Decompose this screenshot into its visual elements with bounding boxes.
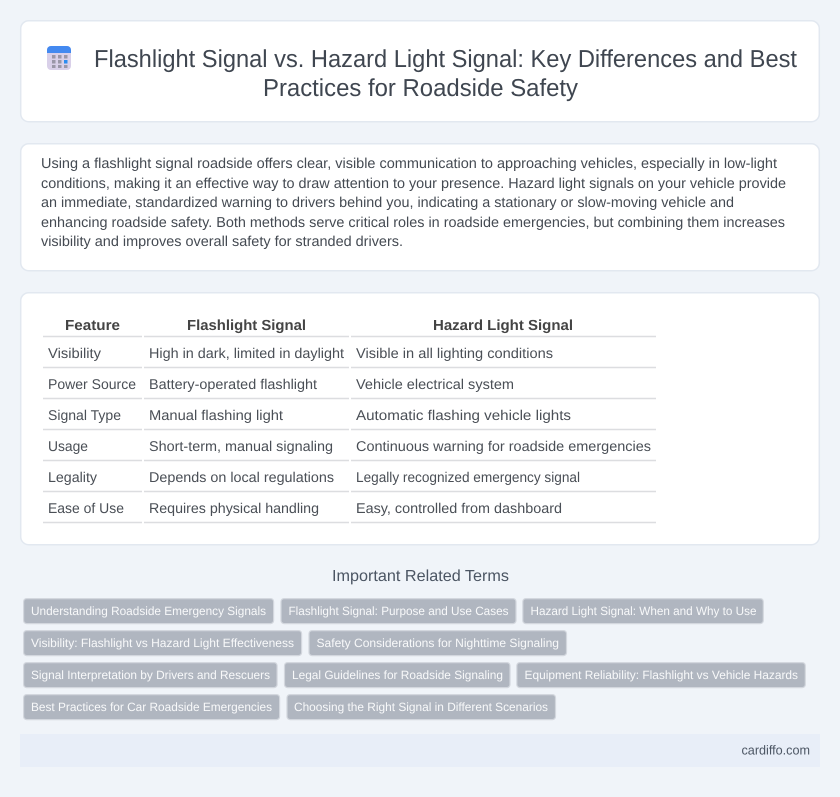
tag [24,631,302,656]
tag: Understanding Roadside Emergency Signals [31,604,266,618]
text block: summary: conditions, making it an effective way to draw attention to your presence. Hazard light signals on your vehicle provide [41,176,786,192]
table row: power source: Battery-operated flashlight [149,377,317,393]
table row: ease of use: Easy, controlled from dashboard [356,501,562,517]
icon: calendar [47,46,71,70]
table row: usage: Short-term, manual signaling [149,439,333,455]
tag: Visibility: Flashlight vs Hazard Light Effectiveness [31,636,294,650]
table row: power source [48,377,514,393]
table row: legality: Legally recognized emergency signal [356,470,580,486]
tag: Hazard Light Signal: When and Why to Use [530,604,757,618]
table header: Hazard Light Signal [433,318,573,334]
table row: ease of use [48,501,562,517]
panel: comparison table [21,293,819,545]
term tags [24,599,805,720]
panel: header [21,21,819,122]
text block: summary: Using a flashlight signal roadside offers clear, visible communication to approaching vehicles, especially in low-light [41,156,777,172]
table row: visibility: Visibility [48,346,102,362]
text block: summary [41,156,786,250]
panel: summary paragraph [21,144,819,271]
table row: signal type: Manual flashing light [149,408,283,424]
tag [284,663,510,688]
tag: Legal Guidelines for Roadside Signaling [292,668,503,682]
table row: legality [48,470,580,486]
table row: usage [48,439,651,455]
tag [309,631,566,656]
table row: visibility: High in dark, limited in daylight [149,346,344,362]
table row: usage: Usage [48,439,88,455]
tag: Equipment Reliability: Flashlight vs Vehicle Hazards [524,668,798,682]
title [94,46,797,102]
tag: Best Practices for Car Roadside Emergencies [31,700,272,714]
tag: Safety Considerations for Nighttime Signaling [316,636,559,650]
tag [24,695,280,720]
table row: signal type [48,408,571,424]
table row: legality: Legality [48,470,98,486]
tag [281,599,516,624]
tag [523,599,763,624]
text block: summary: enhancing roadside safety. Both methods serve critical roles in roadside emergencies, but combining them increases [41,215,785,231]
text block: summary: visibility and improves overall safety for stranded drivers. [41,234,403,250]
table row: usage: Continuous warning for roadside emergencies [356,439,651,455]
footer [20,734,820,767]
table row: visibility: Visible in all lighting conditions [356,346,553,362]
table row: ease of use: Requires physical handling [149,501,319,517]
tag [517,663,805,688]
tag: Choosing the Right Signal in Different Scenarios [294,700,548,714]
table row: signal type: Automatic flashing vehicle lights [356,408,571,424]
tag [24,599,274,624]
tag: Signal Interpretation by Drivers and Rescuers [31,668,270,682]
tag [24,663,277,688]
table row: ease of use: Ease of Use [48,501,124,517]
table header [65,318,573,334]
text block: summary: an immediate, standardized warning to drivers behind you, indicating a stationary or slow-moving vehicle and [41,195,734,211]
tag [287,695,556,720]
table row: visibility [48,346,553,362]
table row: power source: Power Source [48,377,136,393]
table row: signal type: Signal Type [48,408,121,424]
tag: Flashlight Signal: Purpose and Use Cases [288,604,508,618]
table row: power source: Vehicle electrical system [356,377,514,393]
title: Practices for Roadside Safety [263,75,579,102]
table header: Feature [65,318,120,334]
table row: legality: Depends on local regulations [149,470,334,486]
footer text: cardiffo.com [742,742,810,758]
heading: related terms: Important Related Terms [332,568,509,585]
table header: Flashlight Signal [187,318,306,334]
title: Flashlight Signal vs. Hazard Light Signal: Key Differences and Best [94,46,797,73]
